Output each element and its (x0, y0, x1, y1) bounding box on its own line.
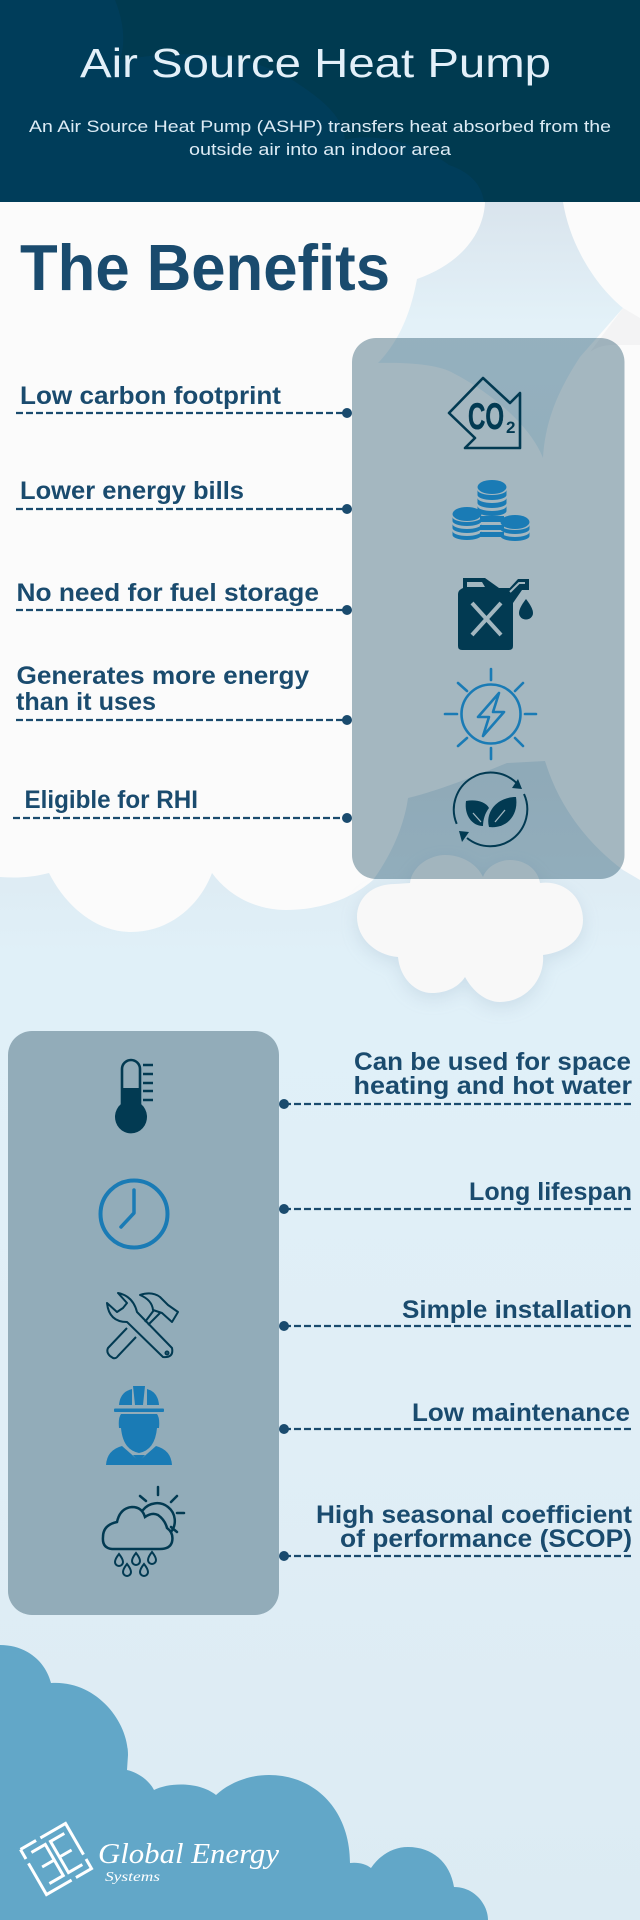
logo text: Global Energy Systems (98, 1839, 280, 1885)
panel: upper icons (352, 338, 624, 879)
benefit: long lifespan (279, 1178, 632, 1214)
subtitle: An Air Source Heat Pump (ASHP) transfers heat absorbed from the (29, 118, 611, 136)
icon: sun with bolt (445, 669, 536, 759)
subtitle (29, 118, 611, 159)
icon: leaf with cycle arrows (454, 773, 527, 846)
heading: The Benefits: The Benefits (20, 231, 390, 304)
icon: CO2 arrow: 2 (506, 418, 515, 437)
icon: clock (100, 1180, 168, 1248)
title: Air Source Heat Pump (80, 40, 551, 86)
benefit: low maintenance: Low maintenance (412, 1399, 630, 1427)
benefit: long lifespan: Long lifespan (469, 1178, 632, 1206)
benefit: lower energy bills: Lower energy bills (20, 477, 244, 505)
icon: rain cloud and sun (103, 1487, 184, 1576)
benefit: space heating and hot water: heating and hot water (354, 1072, 632, 1100)
benefit: lower energy bills (16, 477, 352, 514)
panel: lower icons (8, 1031, 279, 1615)
logo mark (20, 1823, 92, 1895)
benefit: generates more energy (16, 662, 352, 725)
benefit: low carbon footprint (16, 382, 352, 418)
benefit: simple installation (279, 1296, 632, 1331)
icon: coins (452, 480, 530, 541)
icon: CO2 arrow (449, 378, 520, 448)
benefit: generates more energy: Generates more energy (16, 662, 309, 690)
benefit: eligible for RHI (13, 786, 352, 823)
benefit: generates more energy: than it uses (16, 688, 156, 716)
logo text: Global Energy Systems: Systems (105, 1870, 161, 1885)
benefit: low carbon footprint: Low carbon footprint (20, 382, 282, 410)
icon: wrench and hammer (107, 1293, 178, 1358)
benefit: high SCOP (279, 1501, 633, 1561)
benefit: space heating and hot water: Can be used for space (354, 1048, 631, 1076)
icon: thermometer (115, 1060, 153, 1133)
benefit: high SCOP: High seasonal coefficient (316, 1501, 633, 1529)
benefit: no need for fuel storage: No need for fuel storage (16, 579, 319, 607)
background white clouds (0, 202, 640, 932)
subtitle: outside air into an indoor area (189, 141, 452, 159)
footer blue cloud (0, 1645, 488, 1920)
benefit: eligible for RHI: Eligible for RHI (24, 786, 198, 814)
logo text: Global Energy Systems: Global Energy (98, 1839, 280, 1870)
benefit: high SCOP: of performance (SCOP) (340, 1525, 632, 1553)
small white cloud (357, 855, 583, 1002)
benefit: no need for fuel storage (16, 579, 352, 615)
benefit: low maintenance (279, 1399, 632, 1434)
icon: CO2 arrow: CO (468, 396, 504, 437)
icon: fuel can (458, 578, 533, 650)
header band (0, 0, 640, 202)
benefit: simple installation: Simple installation (402, 1296, 632, 1324)
benefit: space heating and hot water (279, 1048, 632, 1109)
icon: worker with hard hat (106, 1386, 172, 1465)
